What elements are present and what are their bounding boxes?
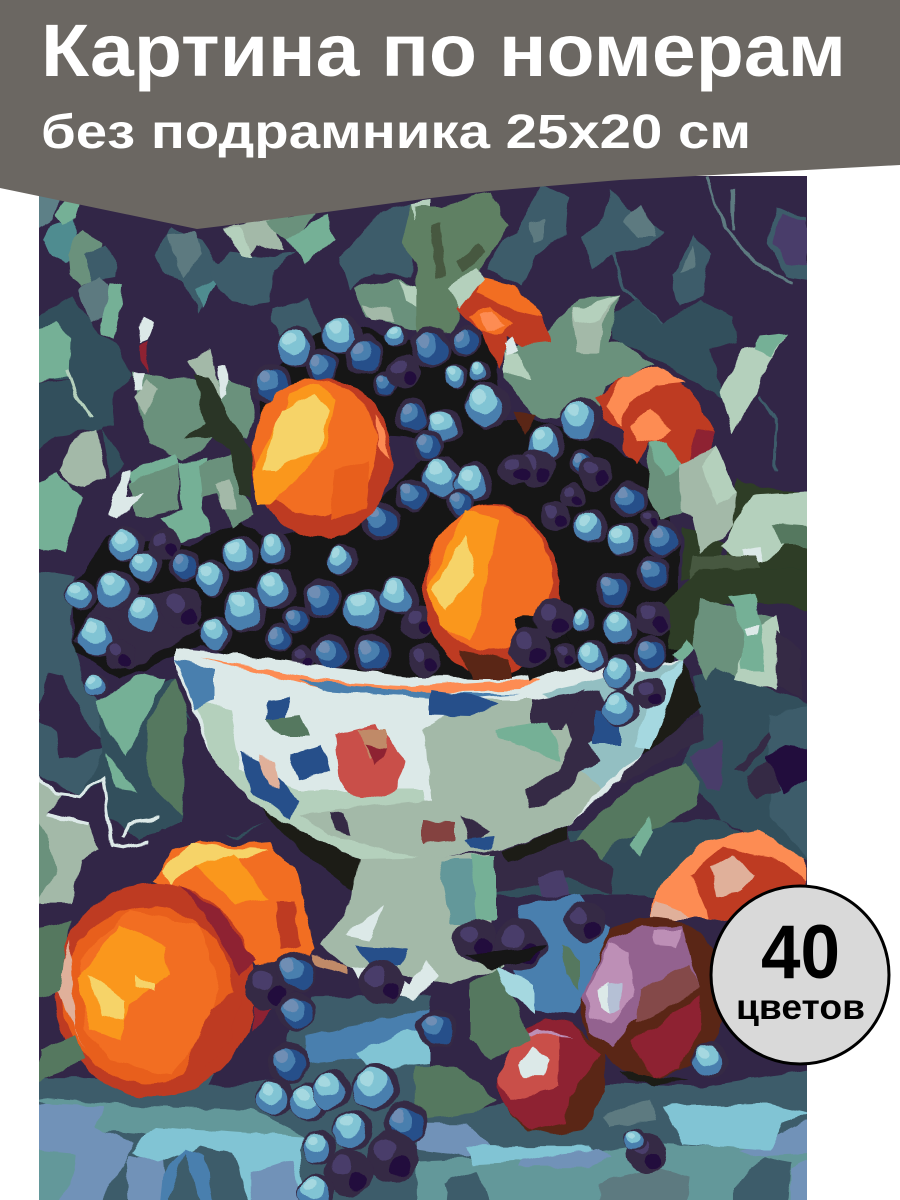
blueberries left cluster <box>65 527 442 698</box>
fruit on the table: peaches <box>39 840 315 1097</box>
table cloth left <box>32 997 429 1200</box>
leaves and red peaches, top right <box>416 193 813 579</box>
loose grapes on the table <box>245 895 666 1200</box>
background foliage lower left <box>32 569 266 903</box>
bowl foot <box>259 809 510 1000</box>
badge: 40 colours <box>711 886 889 1064</box>
background foliage upper left <box>32 189 412 553</box>
background foliage lower right <box>496 662 807 898</box>
bowl <box>176 648 685 859</box>
badge: 40 colours: 40 <box>761 910 840 995</box>
title: Картина по номерам <box>41 9 846 92</box>
background foliage upper right <box>486 176 807 469</box>
fruit on the table: plum, red apple, right peach <box>416 830 806 1135</box>
painting: fruit still life <box>20 160 830 1200</box>
berry mass <box>72 326 682 680</box>
badge: 40 colours: цветов <box>736 988 865 1027</box>
green leaves <box>107 199 429 543</box>
subtitle: без подрамника 25х20 см <box>41 106 751 159</box>
table cloth right <box>416 1070 813 1200</box>
header banner <box>0 0 900 229</box>
blueberries upper <box>252 316 681 607</box>
right leaves below <box>664 568 807 690</box>
peaches in bowl <box>252 378 671 727</box>
